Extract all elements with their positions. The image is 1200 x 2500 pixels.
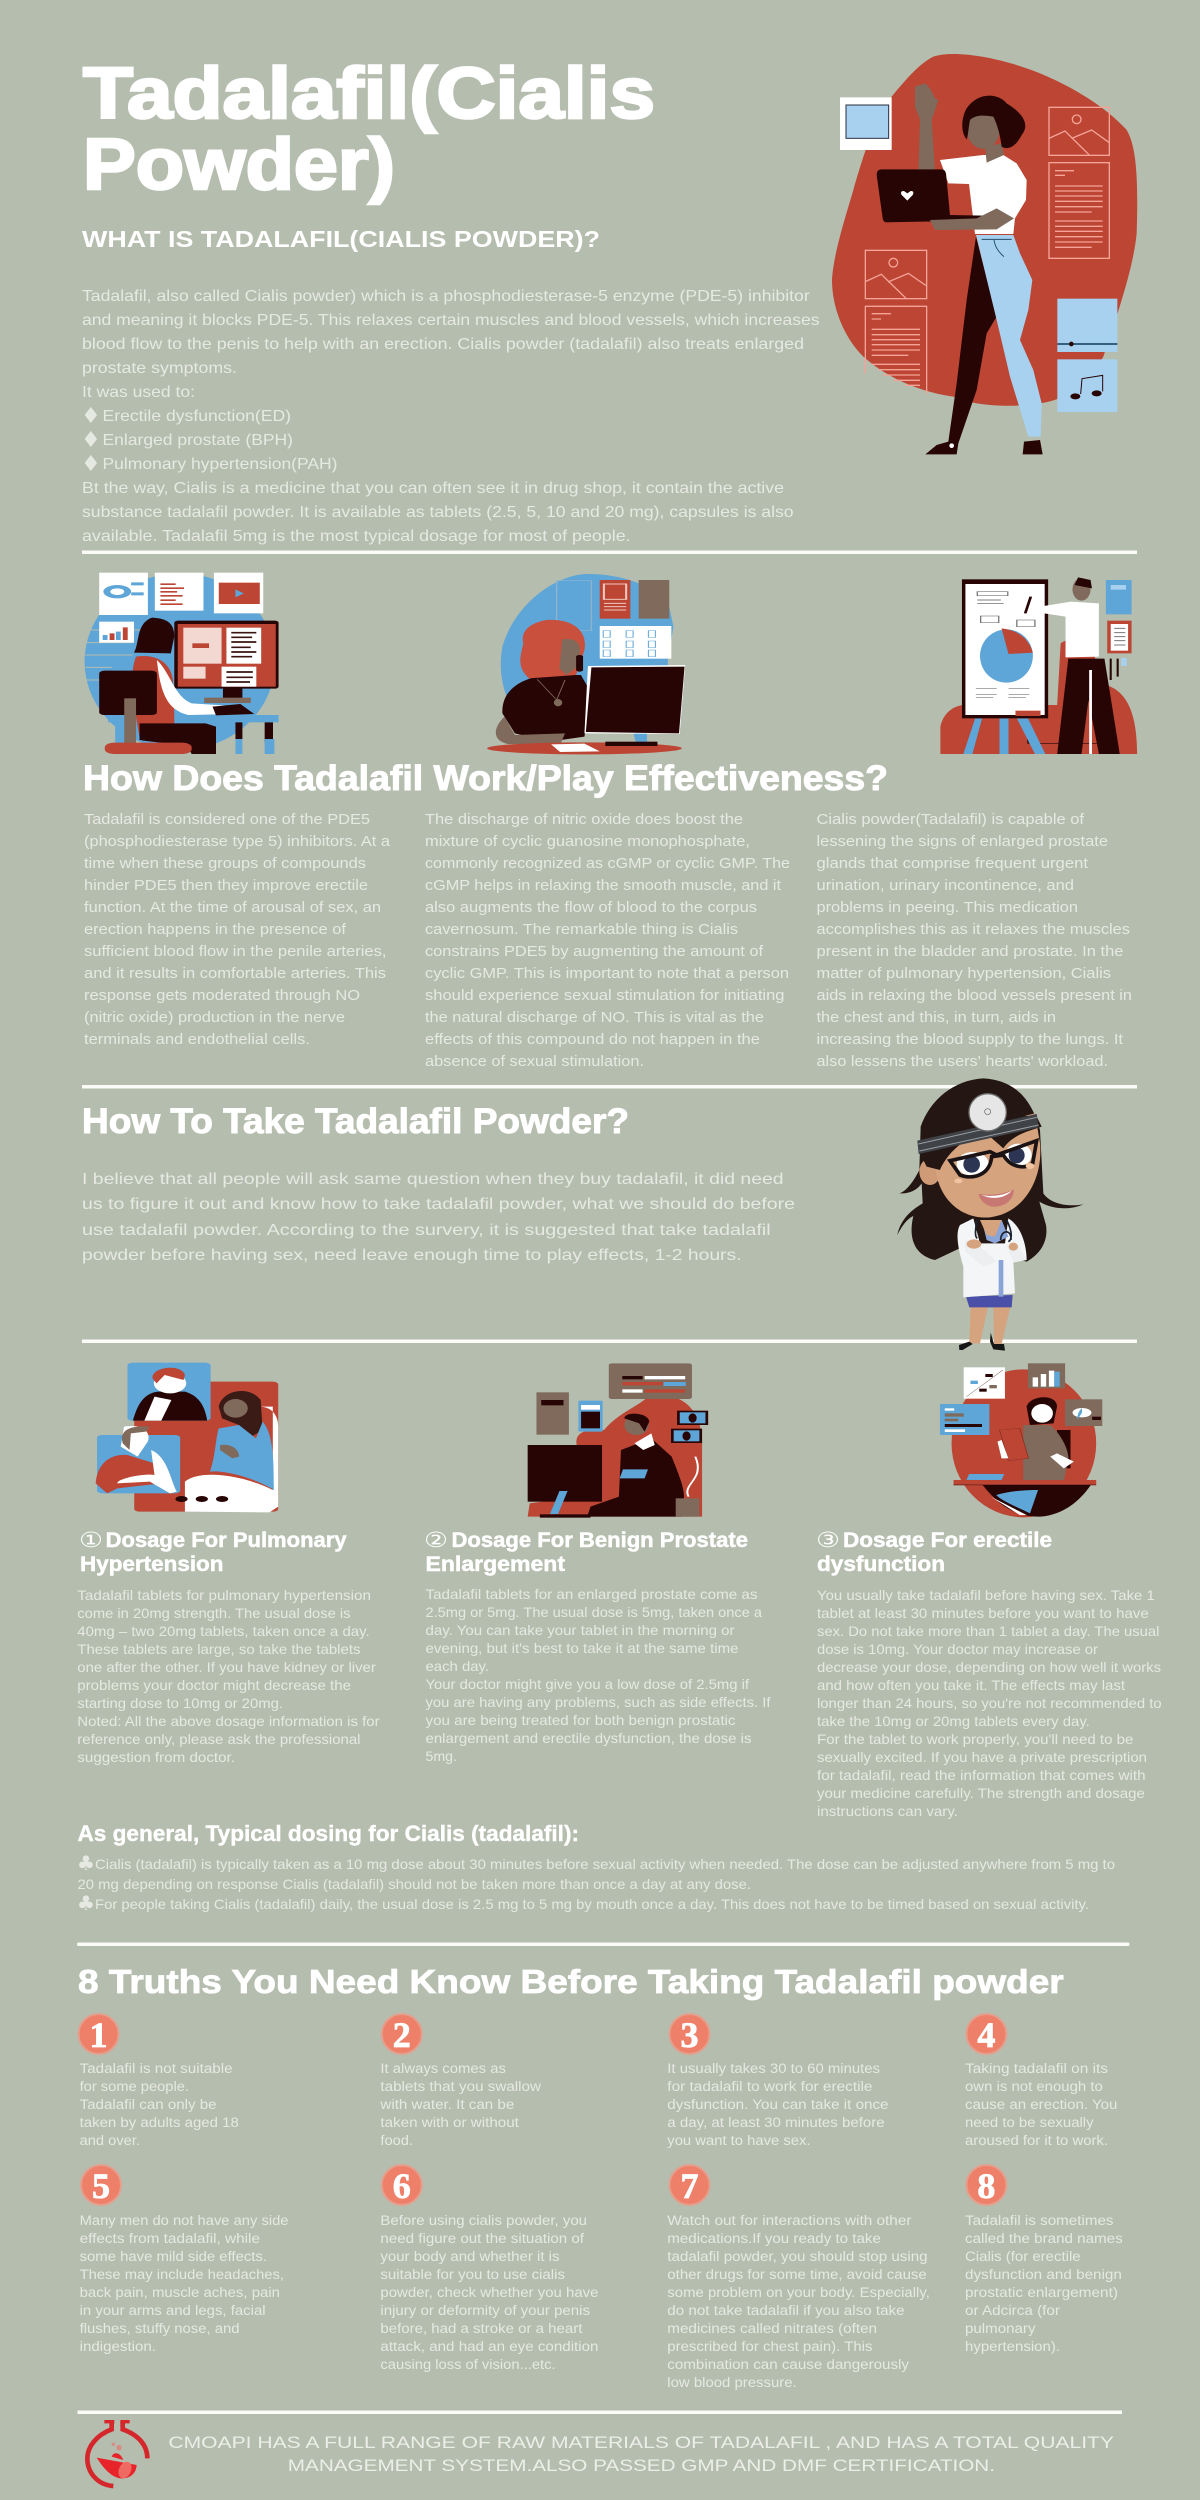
panel: how it works illustrations [85,573,1137,754]
body text: enlargement and erectile dysfunction, the dose is [426,1730,752,1746]
truth 3 [667,2014,888,2148]
dosing notes: 20 mg depending on response Cialis (tadalafil) should not be taken more than once a day at any dose. [78,1876,751,1892]
truth 7: some problem on your body. Especially, [667,2285,930,2300]
column 1 text: terminals and endothelial cells. [84,1031,310,1048]
truth 4 [965,2014,1117,2148]
body text: evening, but it's best to take it at the same time [426,1640,739,1656]
intro text block: ♦ [81,428,101,453]
truth 7: do not take tadalafil if you also take [667,2303,905,2318]
truth 6: need figure out the situation of [380,2231,584,2246]
intro text block: ♦ [81,452,101,477]
truth 6: Before using cialis powder, you [380,2213,587,2228]
paragraph [82,1171,795,1264]
truth 2: 2 [393,2015,411,2055]
column 2 text: constrains PDE5 by augmenting the amount of [425,943,764,960]
arm [915,83,938,173]
column 2 text: should experience sexual stimulation for initiating [425,987,784,1004]
body text: Tadalafil tablets for pulmonary hypertension [77,1587,371,1603]
illustration: woman holding tablet [940,1363,1102,1517]
illustration: woman at desktop [85,573,279,754]
heading: How Does Tadalafil Work/Play Effectiveness? [83,759,888,798]
body text: tablet at least 30 minutes before you want to have [817,1605,1149,1621]
icon: flask logo [87,2420,147,2486]
truth 5: in your arms and legs, facial [80,2303,266,2318]
truth 6 [380,2165,598,2372]
title [83,54,655,205]
truth 8: called the brand names [965,2231,1123,2246]
heading: dysfunction [817,1553,945,1576]
truth 3: a day, at least 30 minutes before [667,2115,885,2130]
title: Tadalafil(Cialis [83,54,655,134]
column 2 text: commonly recognized as cGMP or cyclic GMP. The [425,855,790,872]
body text: you are having any problems, such as side effects. If [426,1694,771,1710]
column 3 text: increasing the blood supply to the lungs. It [816,1031,1124,1048]
truth 2: food. [380,2133,413,2148]
body text: take the 10mg or 20mg tablets every day. [817,1713,1090,1729]
truth 5: back pain, muscle aches, pain [80,2285,280,2300]
truth 4: aroused for it to work. [965,2133,1108,2148]
column 1 text [84,811,391,1048]
body text: one after the other. If you have kidney or liver [77,1659,376,1675]
body text: starting dose to 10mg or 20mg. [77,1695,283,1711]
headband [917,1114,1039,1154]
column 3 text: lessening the signs of enlarged prostate [816,833,1108,850]
intro text block: It was used to: [82,384,195,401]
paragraph: us to figure it out and know how to take tadalafil powder, what we should do before [82,1196,795,1213]
panel: dosage for pulmonary hypertension [77,1528,380,1765]
body text: 5mg. [426,1748,457,1764]
column 2 text: cyclic GMP. This is important to note that a person [425,965,789,982]
column 2 text: cGMP helps in relaxing the smooth muscle, and it [425,877,782,894]
illustration: man presenting chart [940,577,1137,754]
column 2 text: cavernosum. The remarkable thing is Cialis [425,921,738,938]
body text [426,1586,771,1764]
dosing notes: For people taking Cialis (tadalafil) daily, the usual dose is 2.5 mg to 5 mg by mouth once a day. This does not have to be timed based on sexual activity. [95,1896,1089,1912]
truth 7: Watch out for interactions with other [667,2213,912,2228]
dosing notes: ♣ [77,1891,95,1915]
body text: instructions can vary. [817,1803,958,1819]
paragraph: I believe that all people will ask same question when they buy tadalafil, it did need [82,1171,784,1188]
intro text block: ♦ [81,404,101,429]
heading: Enlargement [426,1553,565,1576]
truth 8: prostatic enlargement) [965,2285,1118,2300]
truth 5: flushes, stuffy nose, and [80,2321,239,2336]
dosing notes: ♣ [77,1851,95,1875]
truth 6: 6 [393,2166,411,2206]
column 3 text: Cialis powder(Tadalafil) is capable of [816,811,1085,828]
body text: For the tablet to work properly, you'll need to be [817,1731,1134,1747]
heading: Hypertension [80,1553,224,1576]
panel: how does tadalafil work [83,759,1132,1070]
truth 4: own is not enough to [965,2079,1103,2094]
body text: your medicine carefully. The strength and dosage [817,1785,1145,1801]
truth 6: before, had a stroke or a heart [380,2321,583,2336]
body text: you are being treated for both benign prostatic [426,1712,736,1728]
heading: How To Take Tadalafil Powder? [82,1102,629,1141]
intro text block: blood flow to the penis to help with an erection. Cialis powder (tadalafil) also treats enlarged [82,336,804,353]
column 2 text: mixture of cyclic guanosine monophosphate, [425,833,750,850]
subtitle: WHAT IS TADALAFIL(CIALIS POWDER)? [82,226,600,252]
paragraph: powder before having sex, need leave enough time to play effects, 1-2 hours. [82,1247,742,1264]
column 2 text: also augments the flow of blood to the corpus [425,899,757,916]
column 1 text: response gets moderated through NO [84,987,360,1004]
truth 1: and over. [80,2133,140,2148]
body text: Noted: All the above dosage information is for [77,1713,380,1729]
heading: ② [424,1528,448,1552]
column 3 text: the chest and this, in turn, aids in [816,1009,1056,1026]
illustration: three people on video call [96,1363,278,1512]
truth 7: medicines called nitrates (often [667,2321,877,2336]
head [985,143,1004,163]
heading: ① [79,1528,103,1552]
body text: 40mg – two 20mg tablets, taken once a day. [77,1623,370,1639]
truth 1: for some people. [80,2079,189,2094]
truth 6: causing loss of vision...etc. [380,2357,556,2372]
truth 8: Tadalafil is sometimes [965,2213,1114,2228]
heading: As general, Typical dosing for Cialis (tadalafil): [78,1821,579,1846]
intro text block [81,288,820,545]
truth 4: cause an erection. You [965,2097,1117,2112]
column 2 text: The discharge of nitric oxide does boost the [425,811,743,828]
truth 7 [667,2165,930,2390]
truth 3: It usually takes 30 to 60 minutes [667,2061,880,2076]
truth 6: attack, and had an eye condition [380,2339,598,2354]
heading: Dosage For Benign Prostate [452,1529,748,1552]
panel: dosage illustrations [96,1363,1102,1518]
truth 7: medications.If you ready to take [667,2231,881,2246]
column 2 text: absence of sexual stimulation. [425,1053,644,1070]
company statement: MANAGEMENT SYSTEM.ALSO PASSED GMP AND DMF CERTIFICATION. [288,2456,995,2475]
column 1 text: function. At the time of arousal of sex, an [84,899,381,916]
body text: sex. Do not take more than 1 tablet a day. The usual [817,1623,1159,1639]
truth 1: Tadalafil can only be [80,2097,217,2112]
body text: Your doctor might give you a low dose of 2.5mg if [426,1676,749,1692]
jeans [976,235,1042,437]
truth 1: 1 [90,2015,108,2055]
truth 8: or Adcirca (for [965,2303,1061,2318]
body text: longer than 24 hours, so you're not recommended to [817,1695,1162,1711]
panel: 8 truths [78,1963,1123,2390]
column 3 text: aids in relaxing the blood vessels present in [816,987,1132,1004]
column 1 text: erection happens in the presence of [84,921,347,938]
truth 3: dysfunction. You can take it once [667,2097,888,2112]
dosing notes: Cialis (tadalafil) is typically taken as a 10 mg dose about 30 minutes before sexual activity when needed. The dose can be adjusted anywhere from 5 mg to [95,1856,1115,1872]
panel: typical dosing [77,1821,1115,1915]
truth 6: your body and whether it is [380,2249,560,2264]
truth 7: tadalafil powder, you should stop using [667,2249,928,2264]
mouth [978,1189,1014,1207]
truth 7: other drugs for some time, avoid cause [667,2267,927,2282]
paragraph: use tadalafil powder. According to the survery, it is suggested that take tadalafil [82,1222,771,1239]
heading [79,1528,347,1576]
column 2 text [425,811,790,1070]
truth 5: Many men do not have any side [80,2213,288,2228]
column 1 text: hinder PDE5 then they improve erectile [84,877,368,894]
truth 4: 4 [977,2015,995,2055]
intro text block: Tadalafil, also called Cialis powder) which is a phosphodiesterase-5 enzyme (PDE-5) inhibitor [82,288,810,305]
column 3 text: problems in peeing. This medication [816,899,1078,916]
column 3 text: present in the bladder and prostate. In the [816,943,1124,960]
body text: suggestion from doctor. [77,1749,235,1765]
truth 8 [965,2165,1123,2354]
illustration: man at computer with cards [528,1363,708,1518]
truth 2: It always comes as [380,2061,506,2076]
truth 8: pulmonary [965,2321,1036,2336]
dark leg [925,237,997,454]
body text: 2.5mg or 5mg. The usual dose is 5mg, taken once a [426,1604,762,1620]
truth 3: 3 [680,2015,698,2055]
laptop [877,169,983,222]
panel: how to take [82,1102,795,1264]
body text: day. You can take your tablet in the morning or [426,1622,735,1638]
shirt [940,155,1027,234]
legs [969,1305,1011,1344]
body text [817,1587,1162,1819]
intro text block: Pulmonary hypertension(PAH) [102,456,338,473]
truth 7: low blood pressure. [667,2375,797,2390]
truth 1: Tadalafil is not suitable [80,2061,233,2076]
body text: decrease your dose, depending on how well it works [817,1659,1161,1675]
panel: dosage for benign prostate enlargement [424,1528,771,1764]
truth 8: 8 [977,2166,995,2206]
truth 5: These may include headaches, [80,2267,284,2282]
heading: Dosage For Pulmonary [106,1529,347,1552]
truth 3: for tadalafil to work for erectile [667,2079,872,2094]
company statement: CMOAPI HAS A FULL RANGE OF RAW MATERIALS OF TADALAFIL , AND HAS A TOTAL QUALITY [168,2433,1114,2452]
intro text block: and meaning it blocks PDE-5. This relaxes certain muscles and blood vessels, which increases [82,312,820,329]
body text: dose is 10mg. Your doctor may increase or [817,1641,1098,1657]
head mirror [969,1094,1006,1131]
forearm [930,208,1014,230]
hair fringe [920,1115,1042,1170]
illustration: doctor character [897,1078,1083,1351]
column 1 text: and it results in comfortable arteries. This [84,965,386,982]
heading: ③ [816,1528,840,1552]
truth 1: taken by adults aged 18 [80,2115,239,2130]
truth 8: hypertension). [965,2339,1060,2354]
intro text block: Bt the way, Cialis is a medicine that you can often see it in drug shop, it contain the active [82,480,784,497]
body text: for tadalafil, read the information that comes with [817,1767,1146,1783]
truth 7: 7 [680,2166,698,2206]
body text: come in 20mg strength. The usual dose is [77,1605,351,1621]
truth 5: some have mild side effects. [80,2249,267,2264]
panel: introduction [81,54,1137,545]
column 3 text: also lessens the users' hearts' workload. [816,1053,1108,1070]
heading [816,1528,1052,1576]
panel: footer [87,2420,1114,2486]
column 2 text: effects of this compound do not happen in the [425,1031,760,1048]
body text: problems your doctor might decrease the [77,1677,351,1693]
column 1 text: Tadalafil is considered one of the PDE5 [84,811,370,828]
glasses and eyes [957,1152,989,1176]
truth 6: injury or deformity of your penis [380,2303,590,2318]
body text: These tablets are large, so take the tablets [77,1641,361,1657]
column 3 text: accomplishes this as it relaxes the muscles [816,921,1130,938]
title: Powder) [83,125,395,205]
body text: reference only, please ask the professional [77,1731,361,1747]
ear and face [919,1158,941,1185]
truth 2 [379,2014,541,2148]
truth 7: combination can cause dangerously [667,2357,909,2372]
company statement [168,2433,1114,2475]
truth 5: indigestion. [80,2339,156,2354]
panel: dosage for erectile dysfunction [816,1528,1162,1819]
illustration: woman on phone [487,574,685,754]
column 3 text [816,811,1132,1070]
heading: Dosage For erectile [843,1529,1052,1552]
skirt [966,1295,1013,1307]
truth 4: need to be sexually [965,2115,1094,2130]
truth 8: dysfunction and benign [965,2267,1122,2282]
heading: 8 Truths You Need Know Before Taking Tadalafil powder [78,1963,1064,2000]
truth 2: tablets that you swallow [380,2079,541,2094]
column 2 text: the natural discharge of NO. This is vital as the [425,1009,764,1026]
intro text block: available. Tadalafil 5mg is the most typical dosage for most of people. [82,528,631,545]
body text: each day. [426,1658,489,1674]
truth 8: Cialis (for erectile [965,2249,1081,2264]
truth 4: Taking tadalafil on its [965,2061,1108,2076]
coat [958,1218,1027,1297]
truth 3: you want to have sex. [667,2133,810,2148]
body text: You usually take tadalafil before having sex. Take 1 [817,1587,1155,1603]
intro text block: substance tadalafil powder. It is available as tablets (2.5, 5, 10 and 20 mg), capsules is also [82,504,794,521]
truth 5 [80,2165,288,2354]
truth 7: prescribed for chest pain). This [667,2339,873,2354]
truth 1 [78,2014,239,2148]
body text [77,1587,380,1765]
column 1 text: (nitric oxide) production in the nerve [84,1009,345,1026]
body text: and how often you take it. The effects may last [817,1677,1125,1693]
body text: Tadalafil tablets for an enlarged prostate come as [426,1586,758,1602]
truth 5: effects from tadalafil, while [80,2231,260,2246]
dosing notes [77,1851,1115,1915]
column 3 text: glands that comprise frequent urgent [816,855,1089,872]
column 1 text: (phosphodiesterase type 5) inhibitors. At a [84,833,391,850]
column 3 text: urination, urinary incontinence, and [816,877,1074,894]
column 1 text: time when these groups of compounds [84,855,366,872]
column 1 text: sufficient blood flow in the penile arteries, [84,943,386,960]
truth 6: suitable for you to use cialis [380,2267,565,2282]
heading [424,1528,748,1576]
illustration: woman with laptop [832,54,1137,454]
truth 6: powder, check whether you have [380,2285,598,2300]
column 3 text: matter of pulmonary hypertension, Cialis [816,965,1111,982]
truth 2: with water. It can be [379,2097,514,2112]
intro text block: prostate symptoms. [82,360,237,377]
intro text block: Enlarged prostate (BPH) [102,432,293,449]
truth 2: taken with or without [380,2115,519,2130]
truth 5: 5 [92,2166,110,2206]
body text: sexually excited. If you have a private prescription [817,1749,1147,1765]
intro text block: Erectile dysfunction(ED) [102,408,291,425]
